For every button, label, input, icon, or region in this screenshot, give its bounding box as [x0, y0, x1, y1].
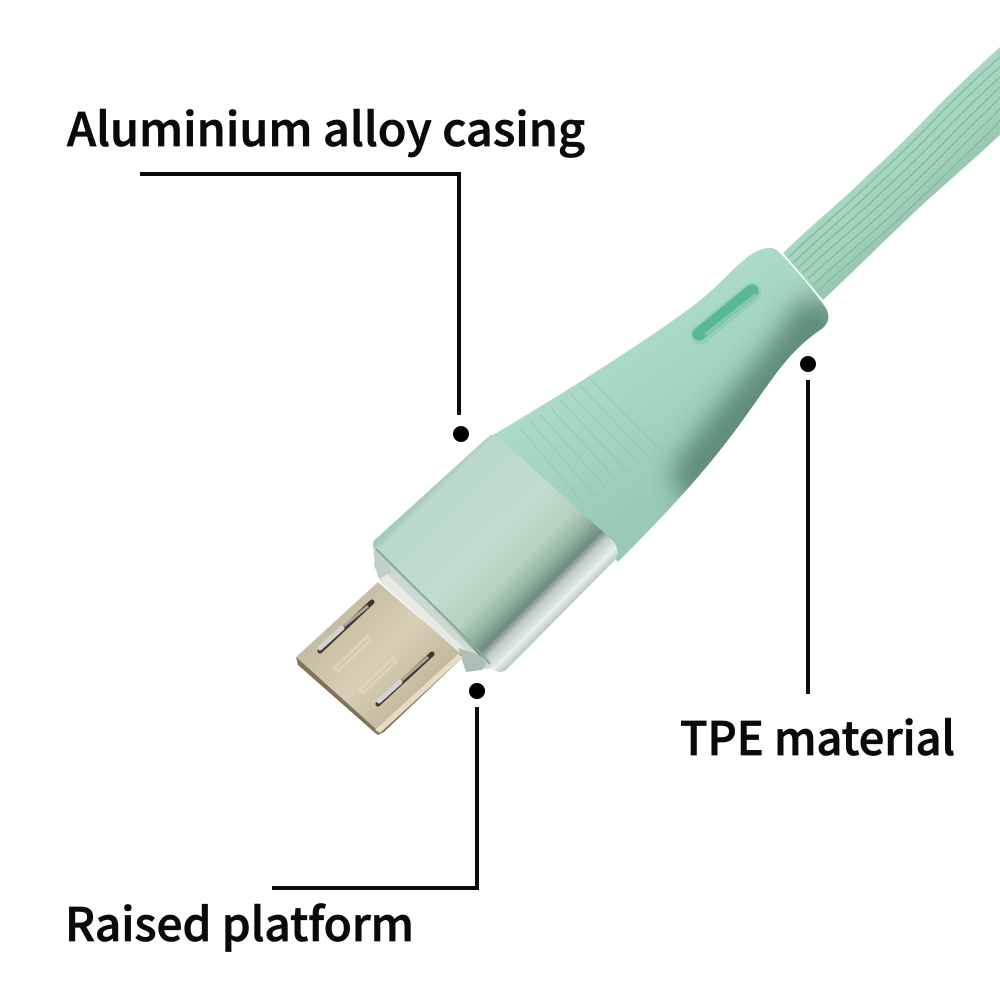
boot slot: [699, 291, 755, 335]
platform: [373, 545, 492, 672]
contact pads: [334, 636, 396, 693]
callout: aluminium alloy casing: [67, 94, 585, 442]
leader line: [806, 380, 810, 694]
cable with ribs: [783, 47, 1000, 300]
contact pin left: [320, 602, 372, 651]
callout: TPE material: [680, 356, 955, 769]
boot casing seam: [494, 435, 618, 558]
label text: Raised platform: [65, 889, 414, 955]
plug: [296, 582, 463, 735]
leader line: [140, 174, 459, 415]
callout: raised platform: [65, 683, 485, 955]
leader line: [272, 707, 477, 888]
label text: Aluminium alloy casing: [67, 94, 585, 160]
marker dot: [453, 426, 469, 442]
label text: TPE material: [680, 703, 955, 769]
strain relief boot: [493, 248, 840, 562]
marker dot: [800, 356, 816, 372]
marker dot: [469, 683, 485, 699]
aluminium casing: [373, 435, 618, 672]
icon: micro USB cable connector: [296, 47, 1000, 735]
contact pin right: [378, 654, 432, 704]
boot ribs: [520, 379, 660, 505]
boot shadow: [670, 300, 840, 510]
